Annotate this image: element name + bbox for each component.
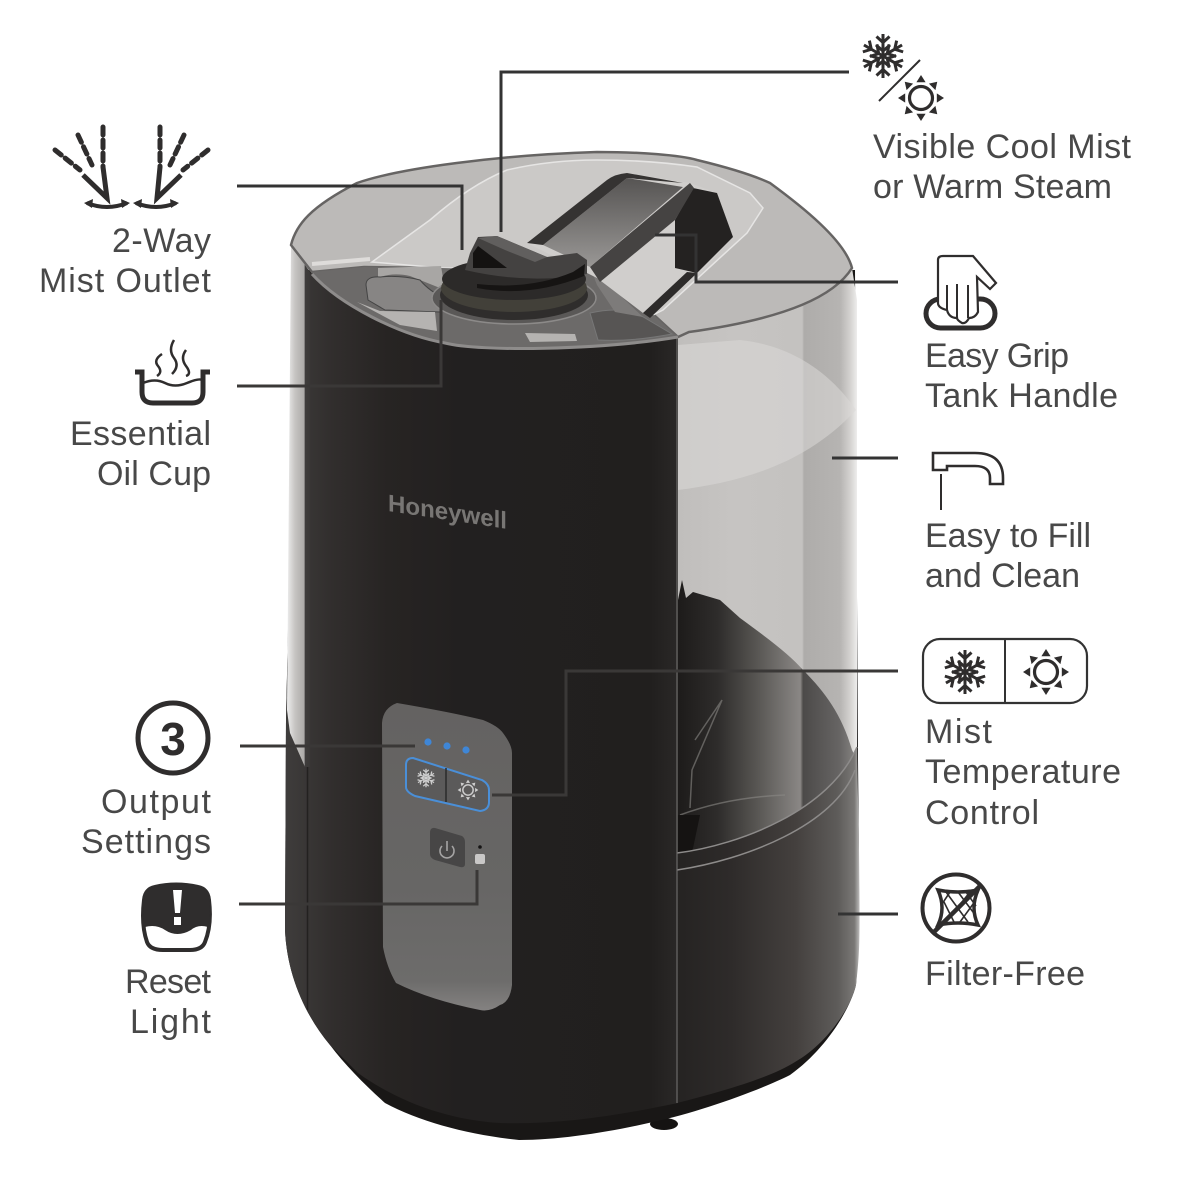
label: or Warm Steam xyxy=(873,168,1112,206)
label xyxy=(70,415,211,493)
front to tank seam xyxy=(676,337,678,1103)
icon: temperature switch xyxy=(923,639,1087,703)
translucent left strip xyxy=(287,245,310,767)
label: Visible Cool Mist xyxy=(873,128,1132,166)
leader line xyxy=(492,671,898,795)
lid inner recess xyxy=(372,160,763,318)
icon: hand on grip xyxy=(926,256,996,328)
leader line xyxy=(832,456,898,460)
column seam xyxy=(306,767,308,1010)
icon: oil cup with steam xyxy=(135,340,210,403)
label: Oil Cup xyxy=(97,455,211,493)
translucent water tank xyxy=(678,268,857,900)
handle bar xyxy=(590,183,694,282)
label xyxy=(925,337,1118,415)
icon: number 3 in circle xyxy=(138,703,208,773)
panel sun xyxy=(458,780,478,800)
plate lighter centre xyxy=(378,266,445,290)
power button xyxy=(430,828,465,867)
leader line xyxy=(655,235,898,282)
callout: reset light xyxy=(125,870,477,1041)
label: Output xyxy=(101,783,212,821)
label: Essential xyxy=(70,415,211,453)
panel face xyxy=(382,703,512,1010)
label xyxy=(925,517,1091,595)
label xyxy=(39,222,212,300)
label: Mist xyxy=(925,713,993,751)
label: 2-Way xyxy=(112,222,211,260)
leader line xyxy=(239,870,477,904)
handle dark recess xyxy=(675,188,733,273)
left lid lip highlight xyxy=(312,259,370,264)
icon: refill alert xyxy=(143,884,210,950)
icon: two-way mist xyxy=(55,127,208,208)
callout: 2-way mist outlet xyxy=(39,127,462,300)
mist nozzle collar xyxy=(432,272,596,324)
body silhouette and base shadow xyxy=(285,270,859,1140)
label: Easy to Fill xyxy=(925,517,1091,555)
callout: 3 output settings xyxy=(81,703,415,861)
label: Easy Grip xyxy=(925,337,1069,375)
label: Light xyxy=(130,1003,212,1041)
label xyxy=(125,963,212,1041)
handle lower bar xyxy=(643,272,697,318)
reset indicator xyxy=(478,845,482,849)
label: Settings xyxy=(81,823,211,861)
water surface light band xyxy=(678,340,856,490)
handle grey floor xyxy=(543,178,683,267)
callout: visible cool mist or warm steam xyxy=(501,34,1132,232)
tank seam lines xyxy=(677,747,857,870)
callout: filter-free xyxy=(838,874,1085,993)
label: Temperature xyxy=(925,753,1121,791)
cool/warm touch buttons xyxy=(406,758,489,811)
three output indicator lights xyxy=(424,738,470,754)
carrying handle cavity xyxy=(527,173,733,313)
icon: number 3 in circle: 3 xyxy=(160,713,186,765)
label xyxy=(925,713,1121,832)
inner tank internal details xyxy=(680,700,785,815)
leader line xyxy=(237,300,441,386)
panel snowflake xyxy=(417,769,435,787)
label xyxy=(81,783,212,861)
lid top xyxy=(291,152,852,337)
front plate rim xyxy=(312,274,678,349)
humidifier product illustration xyxy=(285,152,860,1140)
label: Control xyxy=(925,794,1039,832)
callout: mist temperature control xyxy=(492,639,1121,832)
callout: easy grip tank handle xyxy=(655,235,1118,415)
leader line xyxy=(237,186,462,250)
icon: faucet xyxy=(933,453,1003,510)
callout: essential oil cup xyxy=(70,300,441,493)
lower black tank section xyxy=(677,747,860,1103)
leader line xyxy=(240,744,415,748)
base foot xyxy=(650,1118,678,1130)
black front column xyxy=(285,272,678,1123)
lid grey front plate xyxy=(312,267,678,349)
recess ovals xyxy=(366,276,445,312)
panel: control panel xyxy=(382,703,512,1010)
label xyxy=(873,128,1132,206)
handle top edge xyxy=(527,173,683,245)
Honeywell logo: Honeywell xyxy=(388,490,507,535)
leader line xyxy=(838,912,898,916)
icon: crossed-out filter xyxy=(922,874,990,942)
nozzle spout xyxy=(465,236,587,279)
label: and Clean xyxy=(925,557,1080,595)
icon: snowflake and sun xyxy=(860,34,944,121)
label: Mist Outlet xyxy=(39,262,212,300)
label: Tank Handle xyxy=(925,377,1118,415)
label: Filter-Free xyxy=(925,955,1085,993)
label: Reset xyxy=(125,963,212,1001)
light triangle beside knob xyxy=(590,267,643,317)
dark water interior xyxy=(678,580,857,900)
leader line xyxy=(501,72,849,232)
light slots xyxy=(357,302,437,331)
callout: easy to fill and clean xyxy=(832,453,1091,595)
